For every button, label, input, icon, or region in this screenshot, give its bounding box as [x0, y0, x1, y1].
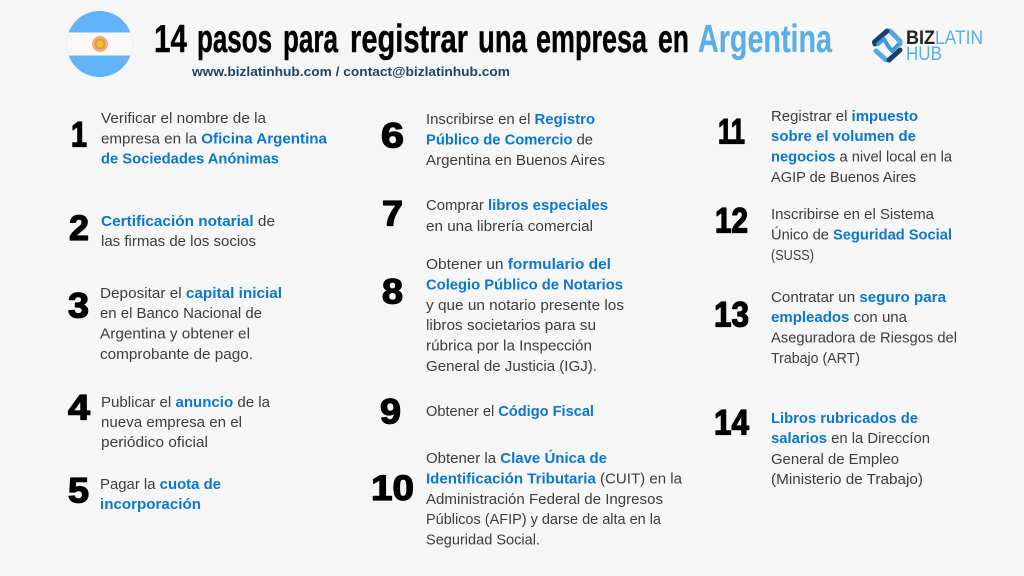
step 5: 5	[68, 472, 89, 510]
title: una	[478, 18, 527, 61]
step 14: (Ministerio de Trabajo)	[771, 472, 923, 488]
step 10	[371, 449, 683, 548]
step 3: Argentina y obtener el	[100, 326, 250, 342]
step 6	[381, 112, 605, 169]
step 7: en una librería comercial	[426, 219, 593, 235]
step 13: Trabajo (ART)	[771, 351, 860, 367]
step 4: periódico oficial	[101, 435, 208, 451]
step 6: Argentina en Buenos Aires	[426, 153, 605, 169]
step 14: 14	[714, 404, 749, 442]
step 12: 12	[715, 202, 748, 240]
step 4: Publicar el anuncio de la	[101, 395, 271, 411]
step 5	[68, 472, 221, 513]
step 14: Libros rubricados de	[771, 411, 918, 427]
step 11: AGIP de Buenos Aires	[771, 170, 916, 186]
step 2: Certificación notarial de	[101, 214, 275, 230]
step 14	[714, 404, 930, 488]
step 10: Obtener la Clave Única de	[426, 449, 607, 467]
step 1: de Sociedades Anónimas	[101, 152, 279, 168]
step 13: Aseguradora de Riesgos del	[771, 330, 957, 346]
step 1: 1	[71, 116, 87, 154]
step 11: 11	[718, 112, 745, 152]
title: registrar	[350, 18, 468, 61]
step 4: nueva empresa en el	[101, 415, 242, 431]
step 9	[380, 392, 594, 432]
step 12: (SUSS)	[771, 248, 814, 264]
title: pasos	[197, 18, 272, 61]
step 3: en el Banco Nacional de	[100, 306, 262, 322]
step 12: Inscribirse en el Sistema	[771, 207, 935, 223]
step 3: Depositar el capital inicial	[100, 286, 282, 302]
step 14: salarios en la Direccíon	[771, 431, 930, 447]
step 8: Obtener un formulario del	[426, 257, 611, 273]
step 13	[714, 290, 957, 367]
step 8: 8	[382, 272, 403, 312]
step 13: empleados con una	[771, 310, 908, 326]
step 2	[69, 209, 275, 250]
step 5: Pagar la cuota de	[100, 477, 221, 493]
step 7: 7	[382, 194, 403, 234]
step 7: Comprar libros especiales	[426, 198, 608, 214]
step 10: Seguridad Social.	[426, 532, 540, 548]
step 8: rúbrica por la Inspección	[426, 338, 592, 354]
step 2: 2	[69, 209, 89, 248]
step 6: 6	[381, 116, 404, 156]
step 5: incorporación	[100, 497, 201, 513]
step 1: Verificar el nombre de la	[101, 111, 267, 127]
step 4: 4	[68, 388, 91, 428]
logo: Biz Latin Hub: HUB	[906, 44, 942, 65]
step 10: 10	[371, 469, 414, 508]
step 6: Público de Comercio de	[426, 132, 593, 148]
step 7	[382, 194, 608, 235]
step 11: sobre el volumen de	[771, 129, 916, 145]
step 9: 9	[380, 392, 401, 432]
step 1: empresa en la Oficina Argentina	[101, 132, 328, 148]
step 11: negocios a nivel local en la	[771, 150, 953, 166]
step 8: y que un notario presente los	[426, 298, 624, 314]
step 8	[382, 257, 624, 375]
step 14: General de Empleo	[771, 452, 899, 468]
step 11	[718, 109, 953, 186]
contact line: www.bizlatinhub.com / contact@bizlatinhub.com	[191, 64, 510, 79]
step 9: Obtener el Código Fiscal	[426, 404, 594, 420]
step 2: las firmas de los socios	[101, 234, 256, 250]
step 8: General de Justicia (IGJ).	[426, 359, 597, 375]
step 3: 3	[68, 286, 89, 326]
title: empresa	[536, 18, 647, 61]
step 10: Administración Federal de Ingresos	[426, 492, 663, 508]
step 8: Colegio Público de Notarios	[426, 278, 623, 294]
title: para	[283, 18, 338, 61]
step 12: Único de Seguridad Social	[771, 226, 952, 244]
step 11: Registrar el impuesto	[771, 109, 918, 125]
title: 14	[154, 18, 187, 61]
title	[154, 18, 832, 61]
logo: Biz Latin Hub	[874, 28, 983, 65]
logo: Biz Latin Hub: BIZ	[906, 28, 935, 49]
title: Argentina	[698, 18, 832, 61]
step 13: 13	[714, 296, 749, 334]
step 6: Inscribirse en el Registro	[426, 112, 595, 128]
step 8: libros societarios para su	[426, 318, 596, 334]
step 12	[715, 202, 952, 264]
step 3: comprobante de pago.	[100, 347, 253, 363]
icon: Argentina flag	[66, 10, 133, 78]
step 3	[68, 286, 282, 363]
step 1	[71, 111, 328, 168]
title: en	[658, 18, 689, 61]
step 10: Identificación Tributaria (CUIT) en la	[426, 472, 683, 488]
logo: Biz Latin Hub: LATIN	[935, 28, 983, 49]
step 4	[68, 388, 271, 451]
step 13: Contratar un seguro para	[771, 290, 947, 306]
step 10: Públicos (AFIP) y darse de alta en la	[426, 512, 662, 528]
